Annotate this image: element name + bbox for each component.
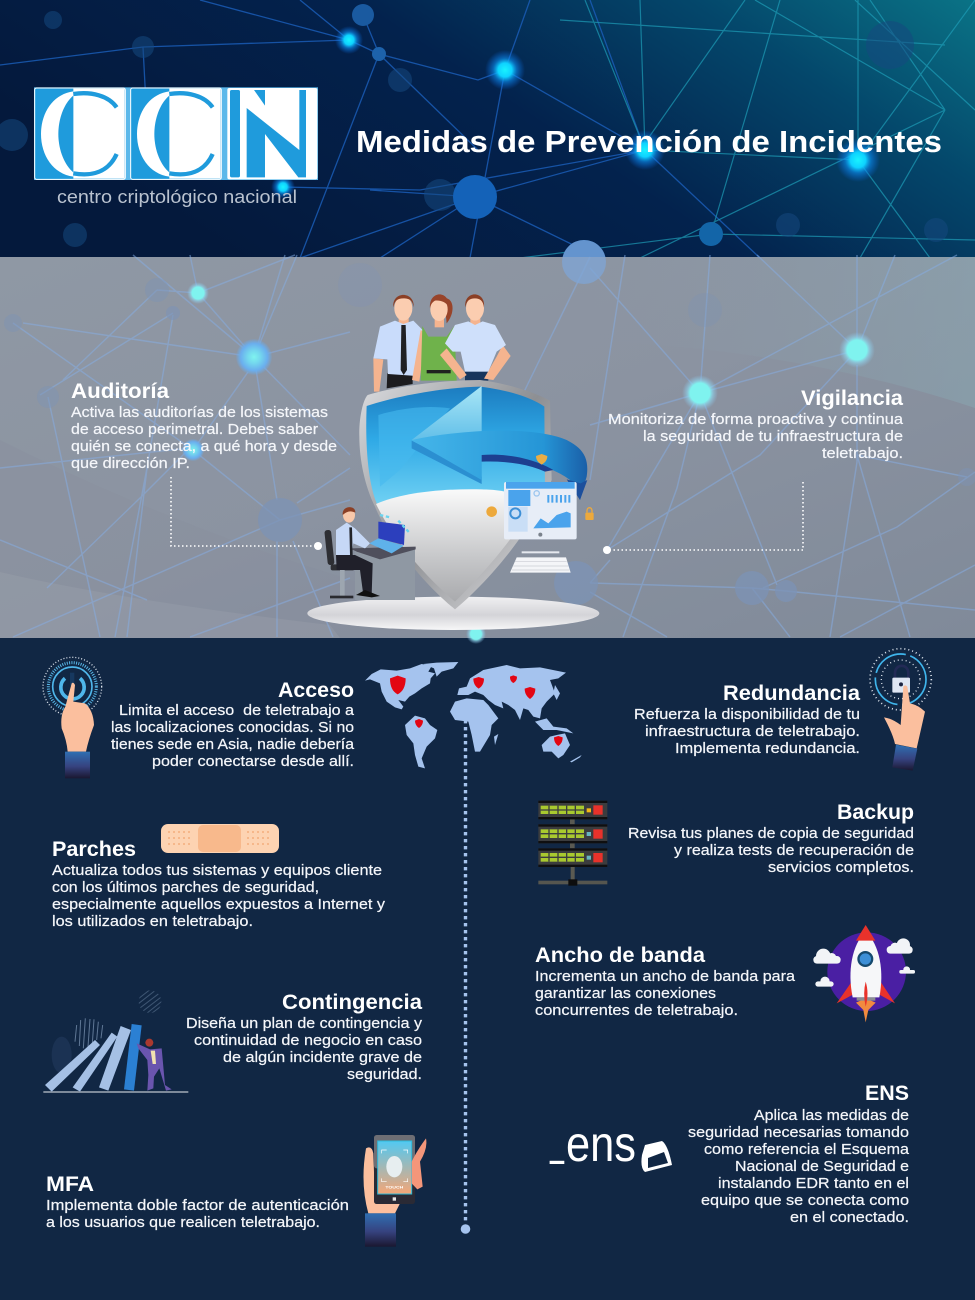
- text block: auditoría: quién se conecta, a qué hora y desde: [71, 438, 337, 455]
- text block: contingencia: Diseña un plan de contingencia y: [186, 1015, 423, 1032]
- monitor with dashboard: [504, 482, 577, 573]
- text block: redundancia: Refuerza la disponibilidad de tu: [634, 706, 860, 723]
- text block: ENS: equipo que se conecta como: [701, 1192, 909, 1209]
- amber padlock: [585, 508, 594, 520]
- illustration: shield, team, desk and monitor: [307, 294, 599, 630]
- text block: auditoría: Auditoría: [71, 380, 169, 403]
- curved arrow: [412, 386, 587, 500]
- text block: redundancia: infraestructura de teletrabajo.: [645, 723, 860, 740]
- text block: vigilancia: Vigilancia: [801, 387, 903, 410]
- icon: server rack: [538, 801, 607, 886]
- text block: parches: Parches: [52, 838, 136, 861]
- text block: acceso: tienes sede en Asia, nadie debería: [111, 736, 355, 753]
- three people on shield: [373, 294, 511, 392]
- text block: contingencia: continuidad de negocio en caso: [194, 1032, 422, 1049]
- amber shield badge: [536, 454, 547, 465]
- icon: bandage: [161, 824, 279, 853]
- text block: acceso: [111, 679, 355, 770]
- text block: auditoría: que dirección IP.: [71, 455, 190, 472]
- text block: ENS: instalando EDR tanto en el: [718, 1175, 909, 1192]
- text block: ENS: Aplica las medidas de: [754, 1107, 909, 1124]
- text block: MFA: [46, 1173, 349, 1231]
- text block: ancho de banda: concurrentes de teletrabajo.: [535, 1002, 738, 1019]
- connector: vigilancia: [603, 482, 803, 554]
- text block: ENS: como referencia el Esquema: [704, 1141, 910, 1158]
- icon: padlock hand: [870, 649, 931, 771]
- shield: [359, 380, 552, 609]
- text block: vigilancia: Monitoriza de forma proactiva y continua: [608, 411, 904, 428]
- platform ellipse: [307, 597, 599, 630]
- text block: ancho de banda: [535, 944, 796, 1019]
- panel: grey network band: [0, 240, 975, 644]
- text block: contingencia: seguridad.: [347, 1066, 422, 1083]
- logo: CCN: [34, 87, 318, 180]
- text block: redundancia: [634, 682, 860, 757]
- text block: parches: [52, 838, 386, 930]
- text block: parches: los utilizados en teletrabajo.: [52, 913, 253, 930]
- text block: MFA: a los usuarios que realicen teletrabajo.: [46, 1214, 320, 1231]
- icon: power button hand: [43, 657, 102, 778]
- text block: redundancia: Implementa redundancia.: [675, 740, 860, 757]
- text block: acceso: las localizaciones conocidas. Si no: [111, 719, 354, 736]
- amber globe badge: [486, 506, 497, 517]
- text block: ENS: Nacional de Seguridad e: [735, 1158, 909, 1175]
- text block: backup: [628, 801, 914, 876]
- text block: backup: servicios completos.: [768, 859, 914, 876]
- text block: acceso: Acceso: [278, 679, 354, 702]
- text block: contingencia: [186, 991, 423, 1083]
- text block: contingencia: Contingencia: [282, 991, 422, 1014]
- logo subtitle: centro criptológico nacional: [57, 187, 297, 207]
- text block: ancho de banda: Ancho de banda: [535, 944, 705, 967]
- connector: auditoría: [171, 477, 322, 550]
- logo: ENS: [549, 1109, 672, 1172]
- text block: contingencia: de algún incidente grave de: [223, 1049, 422, 1066]
- text block: backup: Backup: [837, 801, 914, 824]
- text block: backup: y realiza tests de recuperación de: [674, 842, 914, 859]
- text block: vigilancia: [608, 387, 904, 462]
- text block: auditoría: de acceso perimetral. Debes saber: [71, 421, 318, 438]
- icon: rocket: [813, 925, 915, 1022]
- text block: MFA: MFA: [46, 1173, 94, 1196]
- text block: parches: con los últimos parches de seguridad,: [52, 879, 319, 896]
- text block: backup: Revisa tus planes de copia de seguridad: [628, 825, 914, 842]
- text block: acceso: poder conectarse desde allí.: [152, 753, 354, 770]
- text block: ENS: [688, 1082, 910, 1226]
- text block: ENS: seguridad necesarias tomando: [688, 1124, 909, 1141]
- logo letter N: [230, 90, 306, 177]
- logo: ENS: _: [549, 1109, 565, 1165]
- office worker at desk: [324, 507, 416, 600]
- text block: ancho de banda: Incrementa un ancho de banda para: [535, 968, 796, 985]
- logo: ENS: ens: [566, 1116, 636, 1172]
- text block: auditoría: Activa las auditorías de los sistemas: [71, 404, 328, 421]
- icon: fingerprint phone in hand: TOUCH: [385, 1184, 403, 1189]
- text block: vigilancia: la seguridad de tu infraestructura de: [643, 428, 903, 445]
- text block: redundancia: Redundancia: [723, 682, 860, 705]
- text block: acceso: Limita el acceso de teletrabajo a: [119, 702, 355, 719]
- text block: vigilancia: teletrabajo.: [822, 445, 903, 462]
- icon: falling dominoes: [43, 988, 188, 1093]
- text block: parches: Actualiza todos tus sistemas y equipos cliente: [52, 862, 382, 879]
- title: Medidas de Prevención de Incidentes: [356, 124, 942, 159]
- text block: parches: especialmente aquellos expuestos a Internet y: [52, 896, 386, 913]
- world map: [365, 662, 582, 768]
- panel: header network background: [0, 0, 975, 284]
- text block: ENS: en el conectado.: [790, 1209, 909, 1226]
- logo letter C: [137, 89, 221, 179]
- text block: ancho de banda: garantizar las conexiones: [535, 985, 716, 1002]
- person pushing: [137, 1039, 172, 1091]
- logo letter C: [41, 89, 125, 179]
- text block: MFA: Implementa doble factor de autenticación: [46, 1197, 349, 1214]
- dotted timeline: [461, 720, 470, 1234]
- text block: auditoría: [71, 380, 337, 472]
- icon: fingerprint phone in hand: [363, 1135, 426, 1247]
- text block: ENS: ENS: [865, 1082, 909, 1105]
